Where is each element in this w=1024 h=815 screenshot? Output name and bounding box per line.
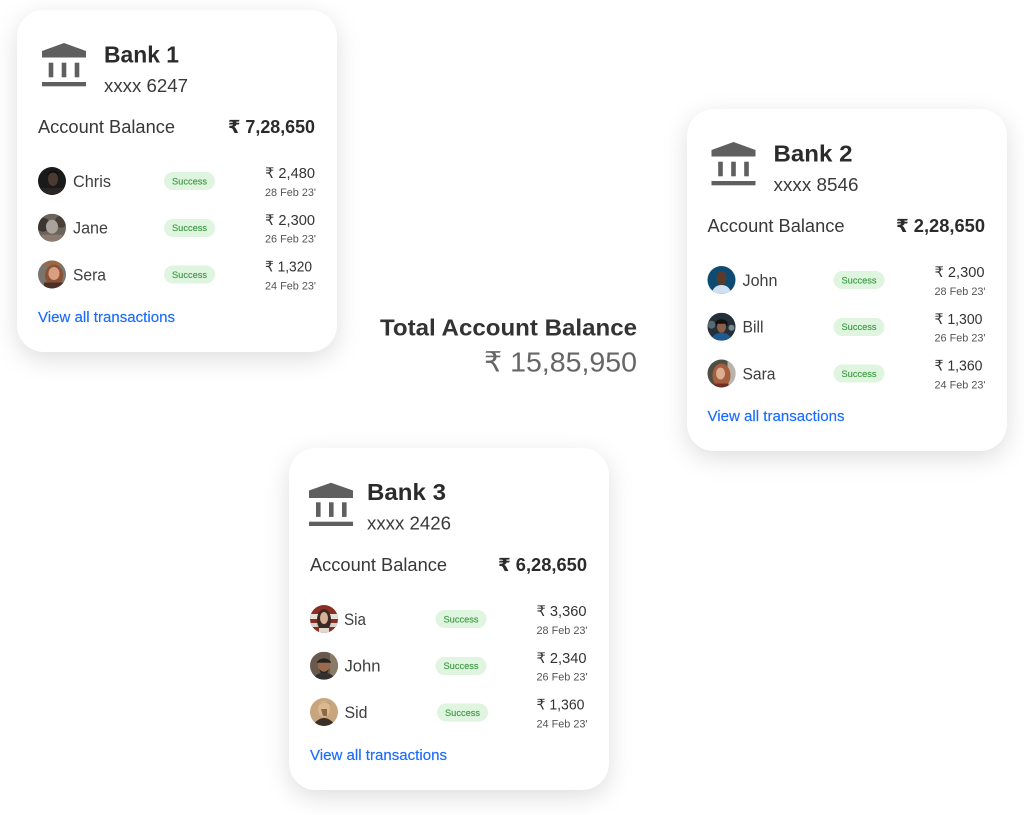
avatar: Sara [708, 360, 736, 388]
transaction row: Jane [73, 213, 316, 246]
transaction row: John [344, 651, 588, 684]
label: account balance: Account Balance [38, 117, 175, 137]
transaction row: John: ₹ 2,300 [934, 265, 984, 281]
transaction row: Bill: 26 Feb 23' [934, 333, 986, 345]
icon: Bank 2 building [712, 142, 756, 185]
account number: Bank 2: xxxx 8546 [774, 175, 858, 195]
account number: Bank 3: xxxx 2426 [367, 514, 451, 534]
avatar: John [310, 652, 338, 680]
account number: Bank 1: xxxx 6247 [104, 76, 188, 96]
avatar: Bill [708, 313, 736, 341]
transaction row: John: John [742, 272, 778, 290]
icon: Bank 1 building [42, 43, 86, 86]
transaction row: Jane: Success [172, 223, 207, 234]
transaction row: Sia: Success [444, 614, 479, 626]
transaction row: Chris: ₹ 2,480 [265, 166, 315, 182]
avatar: Sid [310, 698, 338, 726]
transaction row: John [742, 265, 986, 298]
transaction row: Sid: 24 Feb 23' [536, 718, 588, 730]
transaction row: Bill: ₹ 1,300 [934, 312, 982, 328]
value: total balance: ₹ 15,85,950 [484, 347, 637, 378]
transaction row: John: ₹ 2,340 [536, 651, 586, 667]
value: Bank 2 balance: ₹ 2,28,650 [896, 216, 985, 236]
value: Bank 3 balance: ₹ 6,28,650 [498, 555, 587, 575]
transaction row: Sid: Sid [344, 704, 368, 722]
link: view all transactions: View all transactions [310, 747, 447, 764]
avatar: John [708, 266, 736, 294]
transaction row: Sid: Success [445, 708, 480, 719]
transaction row: Jane: 26 Feb 23' [265, 234, 316, 246]
heading: Bank 3: Bank 3 [367, 479, 446, 505]
transaction row: Sera [73, 260, 316, 292]
transaction row: Sid: ₹ 1,360 [536, 698, 584, 714]
transaction row: Chris: 28 Feb 23' [265, 187, 316, 199]
value: Bank 1 balance: ₹ 7,28,650 [228, 117, 315, 137]
transaction row: Bill: Bill [742, 319, 764, 337]
transaction row: Sara: Sara [742, 366, 776, 384]
icon: Bank 3 building [309, 483, 353, 526]
transaction row: Sera: Success [172, 270, 207, 281]
transaction row: Sera: Sera [73, 266, 107, 284]
transaction row: Sara: ₹ 1,360 [934, 358, 982, 374]
avatar: Sia [310, 605, 338, 634]
avatar: Chris [38, 167, 66, 196]
transaction row: Sera: 24 Feb 23' [265, 280, 316, 292]
transaction row: John: John [344, 658, 380, 676]
transaction row: Chris: Chris [73, 173, 111, 191]
transaction row: John: 26 Feb 23' [536, 672, 588, 684]
label: account balance: Account Balance [310, 555, 447, 575]
transaction row: Sara [742, 358, 986, 392]
heading: Bank 2: Bank 2 [774, 140, 852, 166]
label: account balance: Account Balance [708, 216, 844, 236]
panel: Bank 1 card [17, 10, 337, 352]
transaction row: Chris: Success [172, 176, 207, 188]
transaction row: John: Success [444, 661, 479, 672]
transaction row: Sia: Sia [344, 611, 367, 629]
transaction row: Chris [73, 166, 316, 199]
avatar: Sera [38, 260, 66, 290]
transaction row: Bill: Success [842, 322, 877, 333]
link: view all transactions: View all transactions [708, 408, 844, 425]
transaction row: John: 28 Feb 23' [934, 286, 986, 298]
transaction row: Sia [344, 604, 588, 637]
transaction row: Jane: ₹ 2,300 [265, 213, 315, 229]
transaction row: Sara: Success [842, 369, 877, 380]
transaction row: Sara: 24 Feb 23' [934, 380, 986, 392]
avatar: Jane [38, 214, 66, 242]
link: view all transactions: View all transactions [38, 309, 175, 326]
transaction row: Sia: ₹ 3,360 [536, 604, 586, 620]
title: total account balance: Total Account Balance [380, 315, 637, 341]
heading: Bank 1: Bank 1 [104, 42, 179, 68]
transaction row: Bill [742, 312, 986, 345]
panel: Bank 2 card [687, 109, 1007, 451]
transaction row: Sera: ₹ 1,320 [265, 260, 312, 276]
transaction row: Sia: 28 Feb 23' [536, 625, 588, 637]
transaction row: Sid [344, 698, 588, 730]
panel: Bank 3 card [289, 448, 609, 790]
transaction row: John: Success [842, 276, 877, 286]
transaction row: Jane: Jane [73, 220, 108, 238]
